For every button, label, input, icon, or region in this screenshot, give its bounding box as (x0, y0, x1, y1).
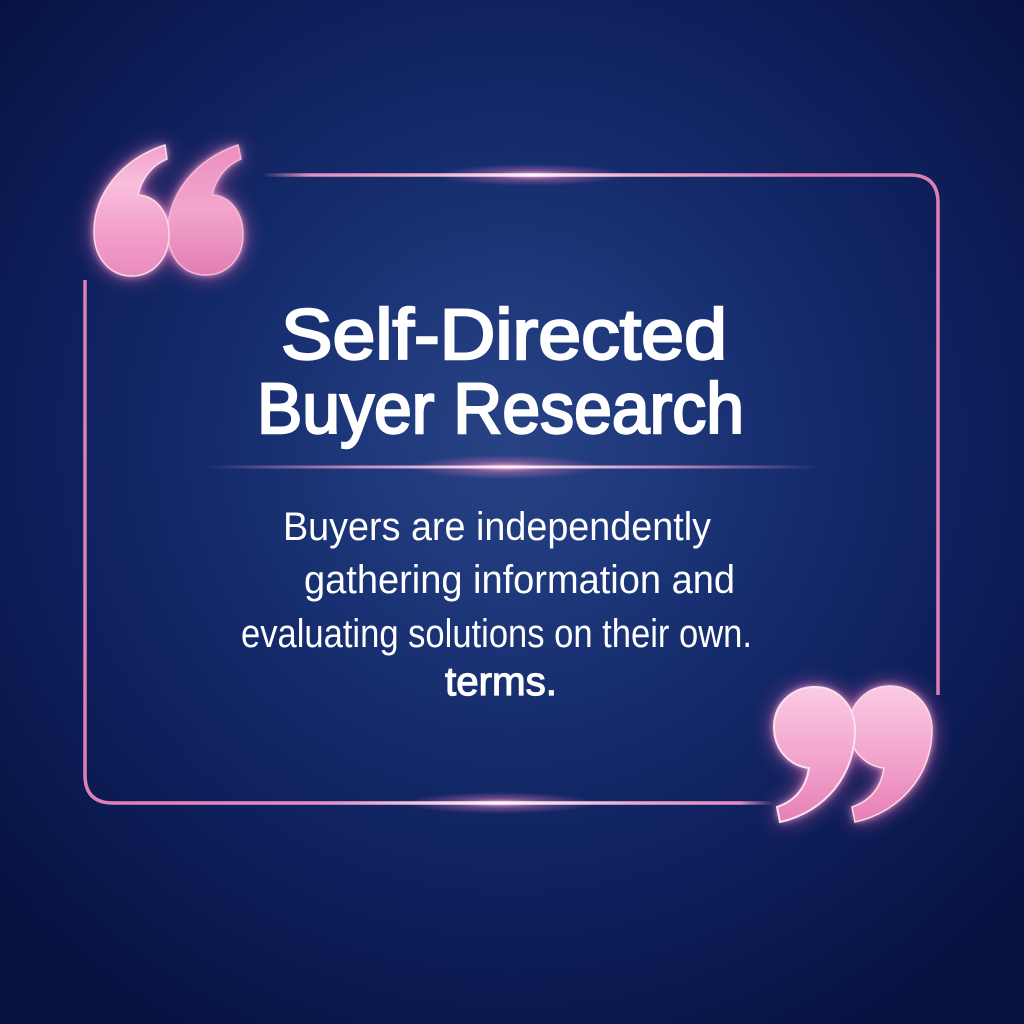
body text: gathering information and (304, 558, 735, 602)
title: Self-Directed (281, 296, 727, 375)
title: Buyer Research (257, 370, 744, 449)
body text: evaluating solutions on their own. (241, 612, 752, 656)
title (257, 296, 744, 449)
divider (205, 455, 820, 479)
body text: terms. (445, 660, 557, 704)
panel: quote frame (85, 164, 938, 814)
body text: Buyers are independently (283, 505, 711, 549)
icon: opening quotation mark (94, 145, 243, 276)
icon: closing quotation mark (774, 686, 932, 822)
body text (241, 505, 752, 704)
